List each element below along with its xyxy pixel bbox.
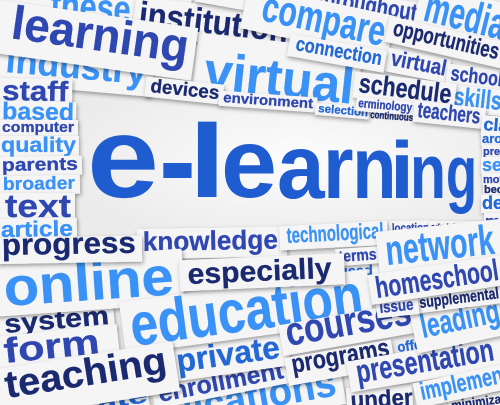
word: during fragment [195, 0, 293, 18]
word: offer: offe [396, 336, 422, 355]
word: terminology: erminology [358, 96, 413, 115]
word: compare [240, 0, 397, 59]
main title: e-learning: n [352, 118, 396, 217]
word: form: form [2, 322, 101, 371]
word: courses: courses [282, 289, 415, 355]
word: system: system [3, 300, 110, 339]
word: staff: staff [2, 75, 69, 107]
word: text: text [5, 188, 71, 224]
main title: e-learning: i [390, 126, 414, 216]
word: parents: parents [2, 154, 78, 175]
word: programs: programs [289, 332, 392, 379]
word: private: private [174, 329, 282, 379]
word: virtual large: virtual [202, 42, 357, 116]
main title: e-learning: e [221, 108, 277, 218]
word: broader: broader [3, 173, 75, 194]
word: knowledge: knowledge [143, 225, 278, 257]
word: technological [279, 218, 388, 250]
word: issue: issue [379, 297, 414, 317]
word: online: online [2, 246, 175, 318]
word: continuous: continuous [370, 109, 414, 124]
main title: e-learning: e [87, 94, 159, 222]
main title: e-learning: l [188, 104, 226, 220]
word: rate fragment [77, 382, 150, 405]
word: computer: computer [2, 119, 74, 136]
word: quality: quality [1, 134, 76, 157]
word: location: location [392, 220, 429, 235]
word: programs [283, 332, 396, 386]
word: connection: connection [294, 33, 384, 70]
word: form [0, 320, 120, 373]
word: schedule: schedule [357, 68, 453, 109]
word: used: used [339, 262, 373, 279]
word: terms: terms [338, 246, 377, 266]
main title: e-learning: g [446, 130, 477, 214]
panel: central background [70, 92, 482, 242]
word: industry: industry [4, 39, 148, 92]
main title: e-learning: a [277, 117, 326, 218]
word: progress: progress [2, 227, 136, 262]
word: article: article [1, 216, 73, 242]
word: administration: administration [431, 222, 483, 233]
word: these [0, 0, 192, 36]
word: teaching: teaching [2, 340, 169, 405]
word: selection: selection [318, 103, 369, 119]
main title: e-learning: n [410, 129, 446, 215]
word: especially: especially [187, 253, 332, 291]
main title: e-learning: r [323, 118, 354, 218]
word: technological: technological [286, 218, 384, 248]
word: based: based [2, 98, 74, 126]
word: education: education [126, 261, 367, 359]
word: virtual small: virtual [389, 45, 449, 81]
word: devices: devices [149, 76, 220, 104]
column: right edge word fragments [481, 131, 500, 231]
word: used [336, 262, 380, 280]
word: environment: environment [223, 89, 314, 111]
main title: e-learning: - [159, 91, 196, 230]
